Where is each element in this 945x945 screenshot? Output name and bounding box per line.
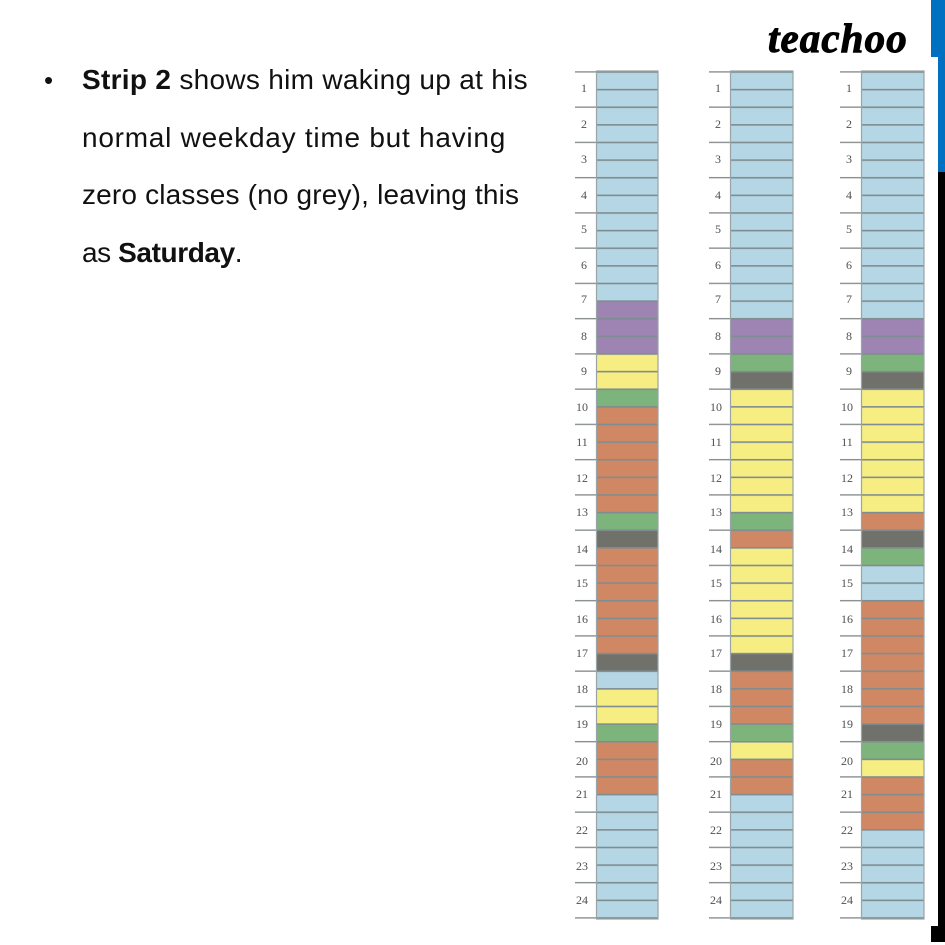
strip 2: 20 xyxy=(710,754,722,768)
strip 3 xyxy=(840,71,924,919)
strip 3: 11 xyxy=(841,435,853,449)
bullet text block: as Saturday. xyxy=(82,237,242,268)
strip 3: 13 xyxy=(841,505,853,519)
strip 3: 2 xyxy=(846,117,852,131)
strip 3: 10 xyxy=(841,400,853,414)
strip 2: 1 xyxy=(715,81,721,95)
strip 3: 15 xyxy=(841,576,853,590)
strip 3: 21 xyxy=(841,787,853,801)
strip 3: 3 xyxy=(846,152,852,166)
strip 3: 24 xyxy=(841,893,853,907)
strip 1: 2 xyxy=(581,117,587,131)
strip 1: 5 xyxy=(581,222,587,236)
strip 2: 18 xyxy=(710,682,722,696)
strip 1: 23 xyxy=(576,859,588,873)
strip 1: 15 xyxy=(576,576,588,590)
strip 1 xyxy=(575,71,658,919)
strip 1: 10 xyxy=(576,400,588,414)
strip 3: 23 xyxy=(841,859,853,873)
strip 2 xyxy=(709,71,793,919)
strip 1: 18 xyxy=(576,682,588,696)
strip 1: 8 xyxy=(581,329,587,343)
strip 3: 16 xyxy=(841,612,853,626)
strip 3: 7 xyxy=(846,292,852,306)
strip 2: 24 xyxy=(710,893,722,907)
strip 1: 16 xyxy=(576,612,588,626)
strip 2: 6 xyxy=(715,258,721,272)
strip 1: 6 xyxy=(581,258,587,272)
strip 1: 13 xyxy=(576,505,588,519)
strip 2: 22 xyxy=(710,823,722,837)
strip 3: 17 xyxy=(841,646,853,660)
strip 3: 14 xyxy=(841,542,853,556)
strip 2: 17 xyxy=(710,646,722,660)
strip 1: 1 xyxy=(581,81,587,95)
strip 2: 16 xyxy=(710,612,722,626)
strip 3: 8 xyxy=(846,329,852,343)
strip 2: 3 xyxy=(715,152,721,166)
strip 1: 20 xyxy=(576,754,588,768)
bullet text block: • xyxy=(44,65,53,95)
strip 1: 12 xyxy=(576,471,588,485)
strip 1: 9 xyxy=(581,364,587,378)
strip 1: 24 xyxy=(576,893,588,907)
strip 2: 10 xyxy=(710,400,722,414)
strip 3: 5 xyxy=(846,222,852,236)
strip 2: 9 xyxy=(715,364,721,378)
strip 3: 9 xyxy=(846,364,852,378)
strip 3: 22 xyxy=(841,823,853,837)
strip 1: 11 xyxy=(576,435,588,449)
strip 2: 19 xyxy=(710,717,722,731)
strip 2: 13 xyxy=(710,505,722,519)
strip 1: 22 xyxy=(576,823,588,837)
strip 2: 14 xyxy=(710,542,722,556)
bullet text block: normal weekday time but having xyxy=(82,122,506,153)
strip 2: 5 xyxy=(715,222,721,236)
strip 2: 7 xyxy=(715,292,721,306)
corner accent bars xyxy=(931,0,945,942)
strip 2: 2 xyxy=(715,117,721,131)
strip 3: 4 xyxy=(846,188,852,202)
strip 3: 6 xyxy=(846,258,852,272)
strip 1: 7 xyxy=(581,292,587,306)
strip 1: 21 xyxy=(576,787,588,801)
strip 2: 23 xyxy=(710,859,722,873)
strip 2: 12 xyxy=(710,471,722,485)
strip 3: 1 xyxy=(846,81,852,95)
strip 2: 8 xyxy=(715,329,721,343)
strip 1: 4 xyxy=(581,188,587,202)
strip 1: 3 xyxy=(581,152,587,166)
strip 3: 12 xyxy=(841,471,853,485)
logo: teachoo: teachoo xyxy=(768,15,908,61)
strip 2: 4 xyxy=(715,188,721,202)
bullet text block: Strip 2 shows him waking up at his xyxy=(82,64,528,95)
strip 3: 20 xyxy=(841,754,853,768)
strip 2: 21 xyxy=(710,787,722,801)
bullet text block xyxy=(44,64,528,268)
strip 1: 17 xyxy=(576,646,588,660)
strip 2: 15 xyxy=(710,576,722,590)
bullet text block: zero classes (no grey), leaving this xyxy=(82,179,519,210)
strip 2: 11 xyxy=(710,435,722,449)
strip 1: 19 xyxy=(576,717,588,731)
strip 3: 18 xyxy=(841,682,853,696)
strip 1: 14 xyxy=(576,542,588,556)
strip 3: 19 xyxy=(841,717,853,731)
